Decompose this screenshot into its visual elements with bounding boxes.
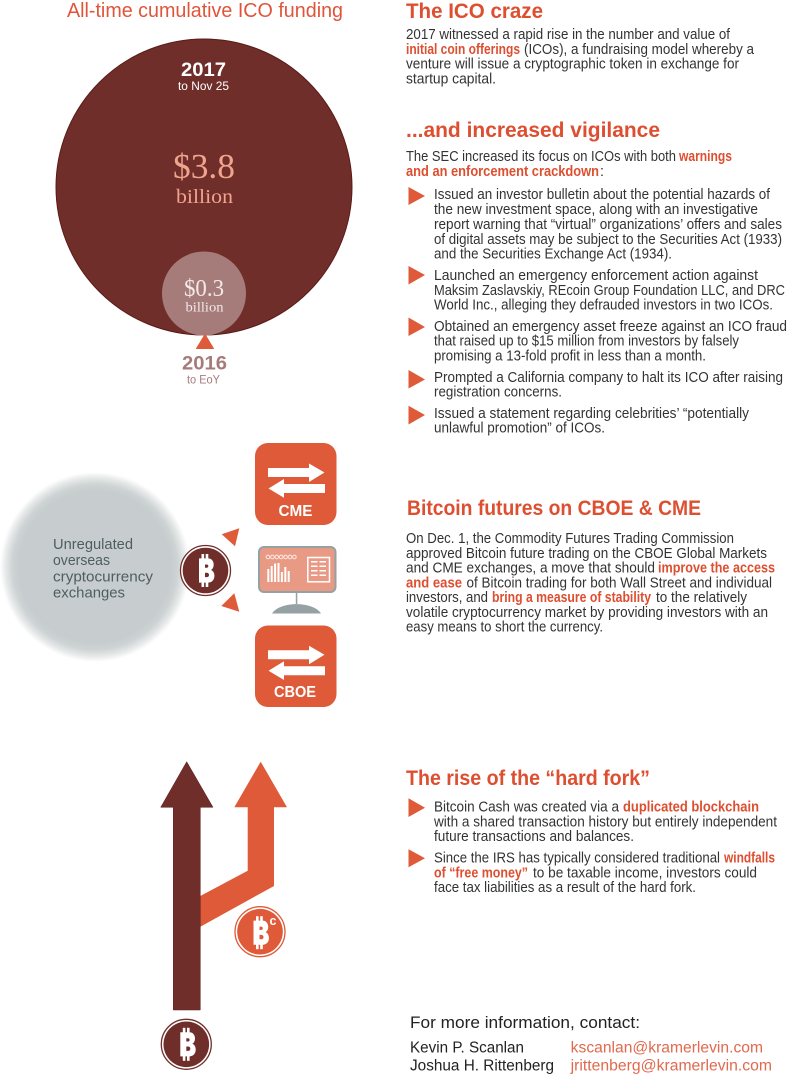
bullet: windfalls of free money: of “free money”	[434, 865, 528, 881]
bullet: celebrities statement	[408, 406, 750, 437]
bullet: duplicated blockchain: Bitcoin Cash was created via a	[434, 800, 619, 816]
bullet: celebrities statement: unlawful promotion” of ICOs.	[434, 421, 605, 437]
body text: 2017 witnessed a rapid rise in the number and value of	[406, 27, 730, 43]
contact: Joshua H. Rittenberg: Joshua H. Rittenberg	[410, 1058, 554, 1075]
bullet: asset freeze: Obtained an emergency asset freeze against an ICO fraud	[434, 319, 787, 335]
body text: volatile cryptocurrency market by providing investors with an	[406, 605, 768, 621]
panel: hard fork arrows	[161, 762, 287, 1069]
label: 2016: 2016	[182, 354, 227, 374]
contact: Kevin P. Scanlan: Kevin P. Scanlan	[410, 1040, 524, 1057]
bullet: asset freeze	[408, 318, 787, 365]
value: 3.8 billion	[173, 147, 235, 208]
value: 0.3 billion: $0.3	[184, 276, 224, 302]
label: 2016	[182, 354, 227, 386]
bullet: windfalls of free money	[408, 849, 775, 896]
bullet: duplicated blockchain: with a shared transaction history but entirely independent	[433, 815, 777, 831]
body text: and CME exchanges, a move that should	[406, 560, 655, 576]
bullet: California company	[408, 370, 783, 401]
icon: Bitcoin Cash coin: c	[270, 914, 276, 928]
contact: Kevin P. Scanlan	[410, 1040, 763, 1057]
icon: CME exchange: CME	[278, 503, 313, 520]
panel: cumulative ICO funding chart	[56, 0, 352, 386]
body text: improve the access	[658, 560, 775, 576]
contact: Joshua H. Rittenberg: jrittenberg@kramerlevin.com	[570, 1058, 772, 1075]
label: 2017: to Nov 25	[178, 81, 229, 93]
label: 2016: to EoY	[187, 374, 220, 386]
bullet: investor bulletin: of digital assets may be subject to the Securities Act (1933)	[434, 232, 782, 248]
bullet: duplicated blockchain: duplicated blockchain	[623, 800, 759, 816]
bullet: investor bulletin: Issued an investor bulletin about the potential hazards of	[434, 187, 770, 203]
label: unregulated exchanges: overseas	[53, 553, 110, 569]
label: unregulated exchanges: exchanges	[53, 586, 125, 602]
arrow: up to CME	[222, 528, 239, 546]
bullet: investor bulletin: report warning that “virtual” organizations’ offers and sales	[434, 217, 782, 233]
bullet: asset freeze: that raised up to $15 million from investors by falsely	[434, 334, 740, 350]
icon: Bitcoin coin	[161, 1019, 211, 1069]
body text: and ease	[406, 576, 462, 592]
body text: On Dec. 1, the Commodity Futures Trading Commission	[406, 531, 734, 547]
body text: investors, and	[406, 590, 488, 606]
label: unregulated exchanges: cryptocurrency	[53, 570, 154, 586]
small circle: 2016 funding	[162, 252, 246, 336]
panel: exchanges diagram	[0, 443, 336, 707]
panel: The ICO craze	[406, 0, 754, 88]
bullet: California company: registration concerns.	[434, 385, 562, 401]
bullet: celebrities statement: Issued a statement regarding celebrities’ “potentially	[434, 406, 750, 422]
heading: ...and increased vigilance	[406, 118, 660, 142]
body text: to the relatively	[656, 590, 748, 606]
bullet: investor bulletin: the new investment space, along with an investigative	[434, 202, 758, 218]
bullet: emergency enforcement action: Launched an emergency enforcement action against	[434, 268, 758, 284]
label: 2017: 2017	[181, 60, 226, 81]
icon: CBOE exchange	[255, 626, 336, 707]
value: 3.8 billion: $3.8	[173, 147, 235, 186]
icon: bitcoin coin	[180, 546, 230, 596]
intro text: The SEC increased its focus on ICOs with both	[406, 149, 676, 165]
bullet: windfalls of free money: windfalls	[723, 851, 775, 867]
heading: The rise of the “hard fork”	[406, 766, 650, 790]
body text: of Bitcoin trading for both Wall Street and individual	[466, 576, 772, 592]
body text: bring a measure of stability	[492, 590, 651, 606]
body text	[406, 27, 754, 88]
value: 3.8 billion: billion	[176, 186, 233, 208]
icon: Bitcoin Cash coin	[235, 907, 285, 957]
bullet: emergency enforcement action: World Inc., alleging they defrauded investors in two ICOs.	[434, 298, 773, 314]
bullet: California company: Prompted a California company to halt its ICO after raising	[434, 370, 783, 386]
large circle: 2017 funding	[56, 39, 352, 335]
icon: trading monitor	[259, 547, 336, 614]
gray circle: unregulated exchanges	[0, 472, 190, 662]
label: 2017	[178, 60, 229, 93]
panel: rise of the hard fork	[406, 766, 777, 896]
contact heading: For more information, contact:	[410, 1013, 640, 1032]
bullet: investor bulletin: and the Securities Exchange Act (1934).	[434, 246, 672, 262]
icon: CBOE exchange: CBOE	[274, 684, 316, 701]
bullet: duplicated blockchain	[408, 798, 777, 845]
pointer triangle	[196, 334, 214, 349]
value: 0.3 billion	[184, 276, 224, 316]
value: 0.3 billion: billion	[186, 301, 224, 316]
intro text: and an enforcement crackdown	[406, 164, 599, 180]
bullet: duplicated blockchain: future transactions and balances.	[434, 829, 634, 845]
contact: Joshua H. Rittenberg	[410, 1058, 772, 1075]
bullet: windfalls of free money: Since the IRS has typically considered traditional	[434, 851, 720, 867]
body text: startup capital.	[406, 72, 496, 88]
bullet: emergency enforcement action	[408, 266, 785, 314]
icon: CME exchange	[255, 443, 336, 525]
intro text	[406, 149, 732, 180]
body text: (ICOs), a fundraising model whereby a	[524, 42, 754, 58]
bullet: investor bulletin	[408, 187, 782, 262]
body text	[406, 531, 775, 636]
intro text: :	[600, 164, 604, 180]
arrow: down to CBOE	[221, 593, 239, 612]
bullet: asset freeze: promising a 13-fold profit in less than a month.	[434, 349, 706, 365]
body text: approved Bitcoin future trading on the CBOE Global Markets	[406, 546, 767, 562]
panel: increased vigilance	[406, 118, 787, 437]
bullet: windfalls of free money: face tax liabilities as a result of the hard fork.	[434, 880, 696, 896]
arrow: Bitcoin main chain	[161, 762, 213, 1010]
panel: contact information	[410, 1013, 772, 1075]
heading: Bitcoin futures on CBOE & CME	[407, 496, 701, 520]
arrow: Bitcoin Cash branch	[200, 762, 287, 927]
bullet: windfalls of free money: to be taxable income, investors could	[533, 865, 757, 881]
contact: Kevin P. Scanlan: kscanlan@kramerlevin.com	[571, 1040, 763, 1057]
label: unregulated exchanges: Unregulated	[53, 537, 133, 553]
body text: venture will issue a cryptographic token in exchange for	[406, 56, 739, 72]
body text: initial coin offerings	[406, 42, 520, 58]
panel: Bitcoin futures on CBOE and CME	[406, 496, 775, 636]
intro text: warnings	[678, 149, 732, 165]
label: unregulated exchanges	[53, 537, 154, 602]
body text: easy means to short the currency.	[406, 620, 603, 636]
